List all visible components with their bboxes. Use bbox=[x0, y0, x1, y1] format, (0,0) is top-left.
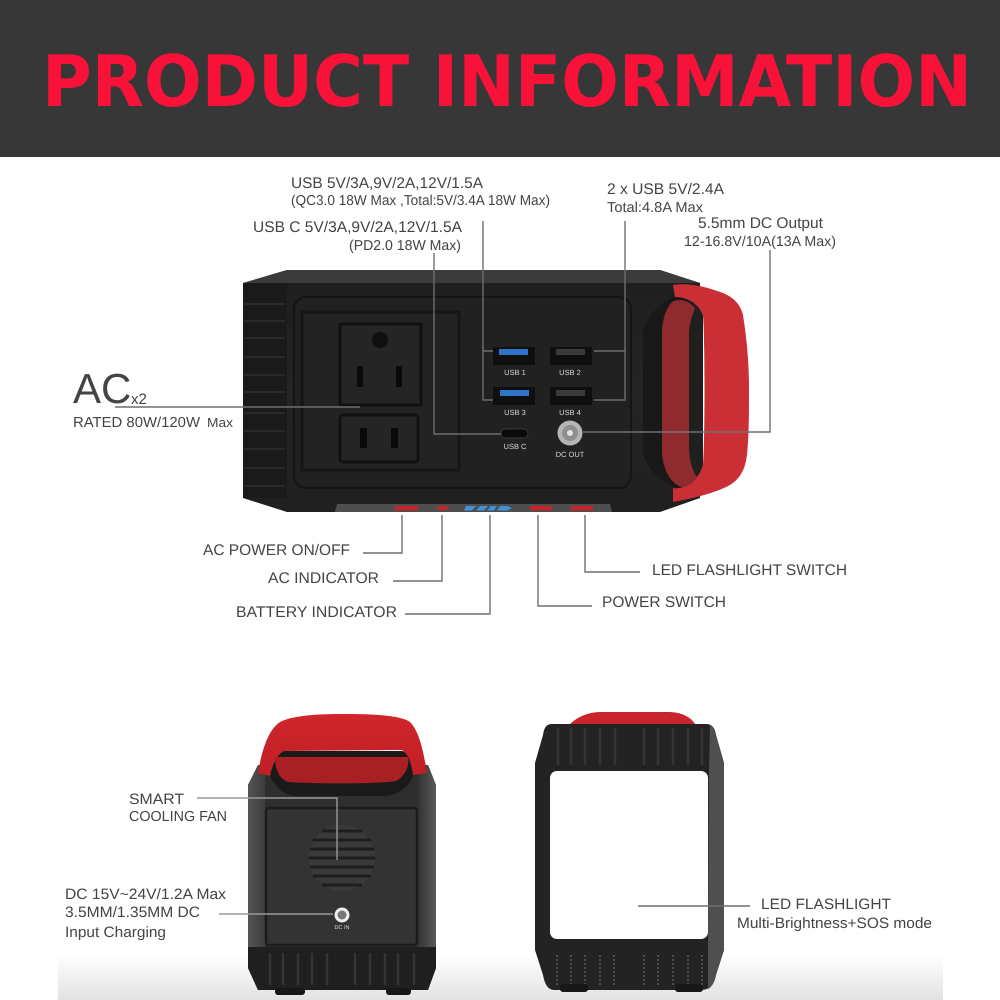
label: DC input: DC 15V~24V/1.2A Max bbox=[65, 886, 227, 903]
main device: front view bbox=[243, 270, 749, 512]
callout: battery indicator bbox=[236, 515, 490, 621]
label: smart cooling fan: SMART bbox=[129, 791, 184, 808]
label: USB QC3.0: USB 5V/3A,9V/2A,12V/1.5A bbox=[291, 175, 484, 192]
label: 2 x USB: 2 x USB 5V/2.4A bbox=[607, 181, 725, 198]
label: AC x2: RATED 80W/120W bbox=[73, 415, 200, 431]
label: 2 x USB: Total:4.8A Max bbox=[607, 200, 703, 216]
USB 4 port: USB 4 bbox=[559, 408, 581, 417]
ground shadow bbox=[58, 955, 943, 1000]
USB 2 port: USB 2 bbox=[559, 368, 581, 377]
device body bbox=[243, 270, 700, 512]
USB 2 port bbox=[550, 347, 592, 377]
label: DC input bbox=[65, 886, 333, 941]
callout: AC power on/off bbox=[203, 515, 402, 559]
callout: AC indicator bbox=[268, 515, 442, 587]
DC OUT port bbox=[556, 420, 585, 459]
DC IN port: DC IN bbox=[335, 925, 350, 931]
DC IN port bbox=[334, 908, 350, 931]
handle bbox=[643, 284, 749, 502]
label: LED flashlight bbox=[638, 896, 932, 932]
top ribs bbox=[558, 728, 702, 765]
front device view: LED flashlight bbox=[535, 712, 724, 992]
label: AC x2: x2 bbox=[131, 391, 147, 408]
AC outlet panel bbox=[302, 312, 459, 470]
USB 3 port: USB 3 bbox=[504, 408, 526, 417]
label: LED flashlight: LED FLASHLIGHT bbox=[761, 896, 891, 913]
label: USB QC3.0: (QC3.0 18W Max ,Total:5V/3.4A 18W Max) bbox=[291, 193, 550, 209]
label: DC output bbox=[684, 215, 836, 250]
label: AC x2 bbox=[73, 365, 360, 431]
DC OUT port: DC OUT bbox=[556, 450, 585, 459]
callout: battery indicator: BATTERY INDICATOR bbox=[236, 604, 397, 621]
label: smart cooling fan: COOLING FAN bbox=[129, 809, 227, 825]
label: USB QC3.0 bbox=[291, 175, 550, 209]
callout: AC indicator: AC INDICATOR bbox=[268, 570, 379, 587]
bottom ribs bbox=[557, 955, 702, 985]
outlet: three-pin bbox=[340, 324, 421, 405]
rear panel bbox=[266, 808, 417, 945]
label: DC output: 5.5mm DC Output bbox=[698, 215, 824, 232]
USB 1 port bbox=[493, 347, 535, 377]
USB C port: USB C bbox=[504, 442, 527, 451]
rear handle bbox=[258, 714, 427, 796]
label: DC input: Input Charging bbox=[65, 924, 166, 941]
label: USB C bbox=[253, 219, 463, 254]
USB 4 port bbox=[550, 387, 592, 417]
control panel recess bbox=[294, 297, 631, 488]
fan grille bbox=[309, 825, 375, 891]
flashlight body bbox=[535, 724, 724, 990]
label: DC output: 12-16.8V/10A(13A Max) bbox=[684, 234, 836, 250]
LED panel bbox=[550, 771, 708, 939]
title: PRODUCT INFORMATION bbox=[42, 40, 972, 123]
callout: power switch bbox=[538, 515, 726, 611]
USB 3 port bbox=[493, 387, 535, 417]
label: AC x2: Max bbox=[207, 415, 234, 430]
rear device view bbox=[248, 714, 436, 995]
label: LED flashlight: Multi-Brightness+SOS mode bbox=[737, 915, 932, 932]
callout: LED flashlight switch bbox=[585, 515, 847, 579]
label: USB C: (PD2.0 18W Max) bbox=[349, 238, 461, 254]
label: smart cooling fan bbox=[129, 791, 337, 860]
front indicator strip bbox=[335, 504, 612, 512]
label: AC x2: AC bbox=[73, 365, 131, 412]
callout: LED flashlight switch: LED FLASHLIGHT SWITCH bbox=[652, 562, 847, 579]
callout lines: top ports bbox=[434, 221, 770, 434]
rear body bbox=[248, 765, 436, 990]
label: USB C: USB C 5V/3A,9V/2A,12V/1.5A bbox=[253, 219, 463, 236]
USB 1 port: USB 1 bbox=[504, 368, 526, 377]
USB C port bbox=[501, 429, 528, 451]
outlet: two-pin bbox=[340, 415, 418, 462]
callout: power switch: POWER SWITCH bbox=[602, 594, 726, 611]
rear base ribs bbox=[248, 947, 436, 995]
callout: AC power on/off: AC POWER ON/OFF bbox=[203, 542, 350, 559]
flashlight handle top bbox=[570, 712, 695, 724]
label: 2 x USB bbox=[607, 181, 725, 216]
label: DC input: 3.5MM/1.35MM DC bbox=[65, 904, 200, 921]
header banner bbox=[0, 0, 1000, 157]
